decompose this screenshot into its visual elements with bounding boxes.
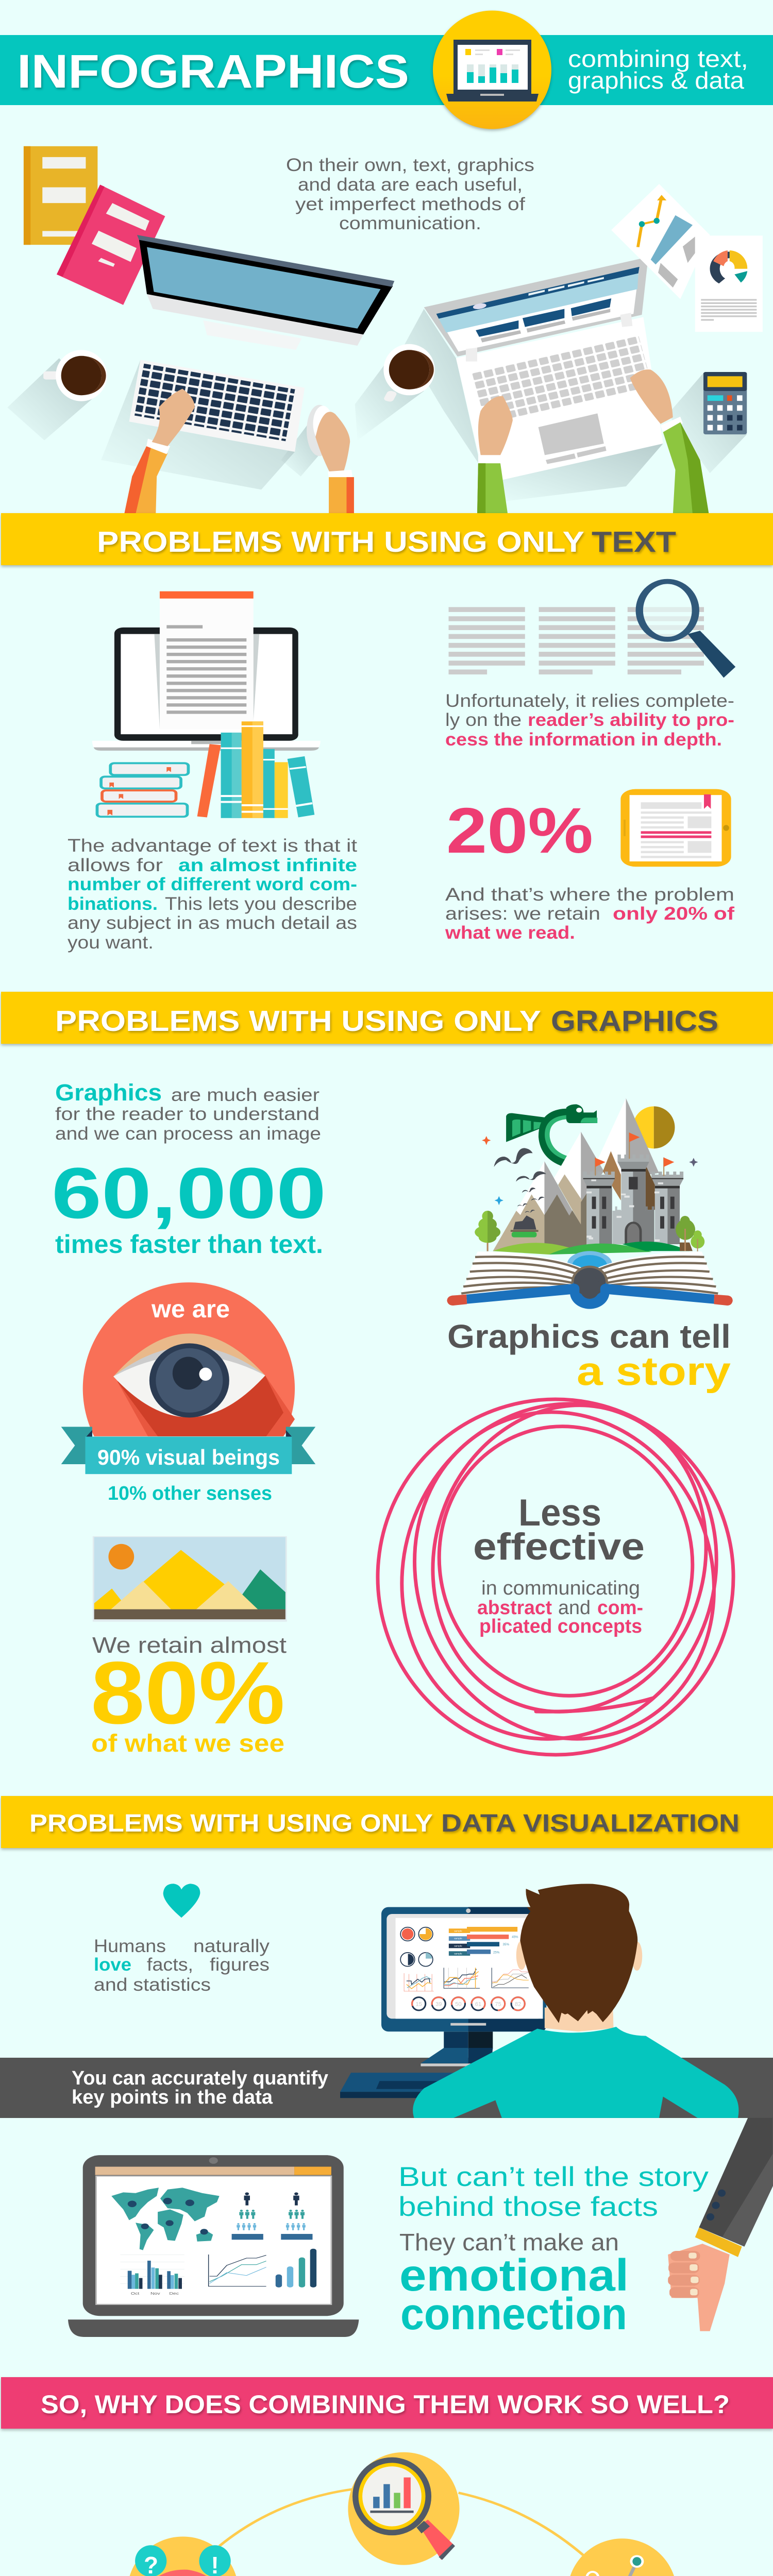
text: advantage of text: allows for [68,855,163,875]
text: graphics can tell a story [447,1318,731,1394]
bar chart: Oct [131,2291,140,2296]
illustration: open storybook with castle and dragon [447,1098,733,1309]
icon: tablet [620,789,731,867]
text: quantify key points: key points in the data [72,2087,273,2108]
text: less effective: abstract [477,1597,552,1619]
bar chart: 45% [512,1936,518,1939]
icon: yellow book [24,146,97,245]
bar chart: 25% [493,1951,500,1954]
trees [475,1211,704,1251]
label: we are: we are [151,1296,230,1323]
text: retain only 20%: arises: we retain [445,904,600,924]
text: can't tell the story: But can’t tell the story [398,2162,709,2192]
person [516,1884,642,2031]
icon: chart paper [611,184,710,299]
diagram: circle of benefits [127,2452,677,2576]
text: graphics can tell a story: Graphics can tell [447,1318,731,1355]
text: less effective: com- [597,1597,643,1619]
section heading: data visualization [1,1796,773,1848]
text: advantage of text: This lets you describe [165,894,357,914]
text: times faster: times faster than text. [55,1230,323,1259]
monitor: 61 [475,2001,481,2007]
text: retain only 20%: only 20% of [613,904,734,924]
section heading: text [1,513,773,565]
icon: coffee cup right [383,344,435,402]
open book [447,1251,733,1309]
label: 10% other senses: 10% other senses [108,1483,272,1504]
section heading: data visualization: DATA VISUALIZATION [441,1810,740,1837]
intro text: and data are each useful, [298,175,523,195]
text: relies on reader: reader’s ability to pro- [528,710,734,730]
text: advantage of text: any subject in as much detail as [68,913,357,933]
text: can't tell the story: They can’t make an [399,2229,619,2256]
line chart [209,2255,266,2286]
text: graphics are easier: Graphics [55,1079,162,1106]
icon: hands on laptop with green sleeves [477,369,709,514]
icon: calculator [703,372,747,434]
text: advantage of text: an almost infinite [178,855,357,875]
text: retain only 20% [445,885,734,943]
dial row [410,1995,526,2012]
text: retain almost 80%: 80% [91,1643,285,1742]
pill chart [276,2249,316,2287]
dark band [0,2058,773,2118]
text: graphics are easier: for the reader to understand [55,1104,320,1124]
icon: brain with question and exclamation [127,2536,239,2576]
text: less effective: plicated concepts [479,1616,642,1637]
stat: 20%: 20% [446,795,593,867]
people pyramids [232,2192,312,2240]
bar chart: sample [454,1937,462,1940]
text: relies on reader: cess the information in depth. [445,730,722,750]
intro text [286,155,534,233]
section heading: text: TEXT [592,526,676,558]
text: retain almost 80%: We retain almost [92,1633,287,1658]
illustration: laptop with world map and charts [68,2155,359,2337]
icon: donut chart report [695,235,763,332]
text: can't tell the story: behind those facts [398,2192,658,2222]
text: humans love facts: and statistics [94,1975,211,1995]
section heading: data visualization: PROBLEMS WITH USING ONLY [29,1810,433,1837]
icon: hand on mouse [307,405,354,514]
bar chart: Nov [150,2291,160,2296]
sparkles [482,1136,698,1205]
hills and river [493,1242,690,1277]
bar chart: 35% [503,1943,510,1946]
illustration: person at dashboard monitor [340,1884,738,2118]
icon: dragon [506,1104,597,1163]
illustration: laptop with document and books [92,591,321,818]
text: quantify key points: You can accurately quantify [72,2067,328,2089]
title: Infographics: INFOGRAPHICS [17,45,409,98]
section heading: graphics: GRAPHICS [551,1005,718,1038]
subtitle: combining text, [568,45,748,72]
icon: open laptop [424,257,663,480]
bar chart: sample [454,1945,462,1948]
scribble circle [335,1353,773,1797]
text: advantage of text: binations. [68,894,158,914]
monitor: 75 [495,2001,501,2007]
icon: keyboard [129,360,305,452]
bar chart: sample [454,1952,462,1955]
text: retain only 20%: what we read. [445,923,575,943]
icon: hand on keyboard with orange sleeve [124,389,195,514]
text: less effective: in communicating [481,1578,640,1599]
monitor: 39 [435,2001,442,2007]
text: advantage of text: The advantage of text is that it [68,836,357,856]
text: advantage of text: you want. [68,933,154,953]
icon: landscape picture [93,1536,287,1622]
bubble glyphs [144,2552,219,2576]
world map [111,2188,220,2250]
text: less effective: and [558,1597,591,1619]
illustration: desk with computers, hands and coffee [7,146,763,514]
section heading: why combining works [1,2377,773,2429]
text: less effective [473,1492,645,1637]
text: graphics are easier [55,1079,321,1144]
text: advantage of text [68,836,357,953]
text: humans love facts: Humans [94,1936,166,1956]
text: graphics are easier: and we can process an image [55,1124,321,1144]
monitor: 82 [515,2001,521,2007]
cave [511,1215,539,1238]
icon: desktop monitor [137,235,394,350]
text: humans love facts: love [94,1955,131,1975]
section heading: text: PROBLEMS WITH USING ONLY [97,526,584,558]
line charts [404,1968,529,1991]
icon: castle [583,1155,683,1244]
text: humans love facts: figures [210,1955,270,1975]
text: can't tell the story [398,2162,709,2339]
icon: laptop with chart in yellow circle [433,10,551,129]
text: humans love facts: facts, [147,1955,193,1975]
section heading: why combining works: SO, WHY DOES COMBINING THEM WORK SO WELL? [41,2390,730,2419]
flags [595,1132,674,1176]
icon: text columns with magnifier [449,582,735,677]
monitor: 15 [416,2001,422,2007]
bar chart [120,2255,184,2296]
text: relies on reader [445,691,734,750]
text: graphics can tell a story: a story [577,1348,731,1394]
text: can't tell the story: connection [400,2289,627,2339]
text: less effective: effective [473,1526,645,1568]
bats [494,1148,546,1213]
icon: thumbs down arm [668,2118,773,2331]
subtitle: graphics & data [568,67,744,94]
subtitle [568,45,748,94]
stat: 60,000: 60,000 [52,1153,326,1233]
icon: network nodes [567,2538,677,2576]
text: humans love facts: naturally [193,1936,270,1956]
bar chart: sample [454,1929,462,1933]
intro text: yet imperfect methods of [295,194,525,214]
text: humans love facts [94,1936,270,1995]
section heading: graphics: PROBLEMS WITH USING ONLY [55,1005,541,1038]
icon: coffee cup left [43,350,107,401]
bar chart: Dec [169,2291,179,2296]
bar chart [449,1927,518,1956]
text: quantify key points [72,2067,328,2108]
text: advantage of text: number of different word com- [68,874,357,894]
title banner [0,10,773,129]
intro text: communication. [339,213,481,233]
intro text: On their own, text, graphics [286,155,534,175]
monitor [381,1907,546,2066]
icon: pink book [57,184,165,305]
text: can't tell the story: emotional [399,2250,629,2300]
icon: magnifier with bar chart [348,2452,460,2565]
icon: heart [163,1884,200,1918]
text: graphics are easier: are much easier [171,1085,320,1105]
text: relies on reader: Unfortunately, it relies complete- [445,691,734,711]
text: relies on reader: ly on the [445,710,522,730]
text: less effective: Less [518,1492,601,1534]
label: 90% visual beings: 90% visual beings [97,1445,280,1469]
gauges [400,1927,433,1967]
text: retain only 20%: And that’s where the problem [445,885,734,905]
monitor: 50 [455,2001,462,2007]
text: retain almost 80%: of what we see [91,1730,284,1757]
icon: eye with ribbon [61,1282,315,1474]
section heading: graphics [1,992,773,1044]
shadows [7,309,747,503]
